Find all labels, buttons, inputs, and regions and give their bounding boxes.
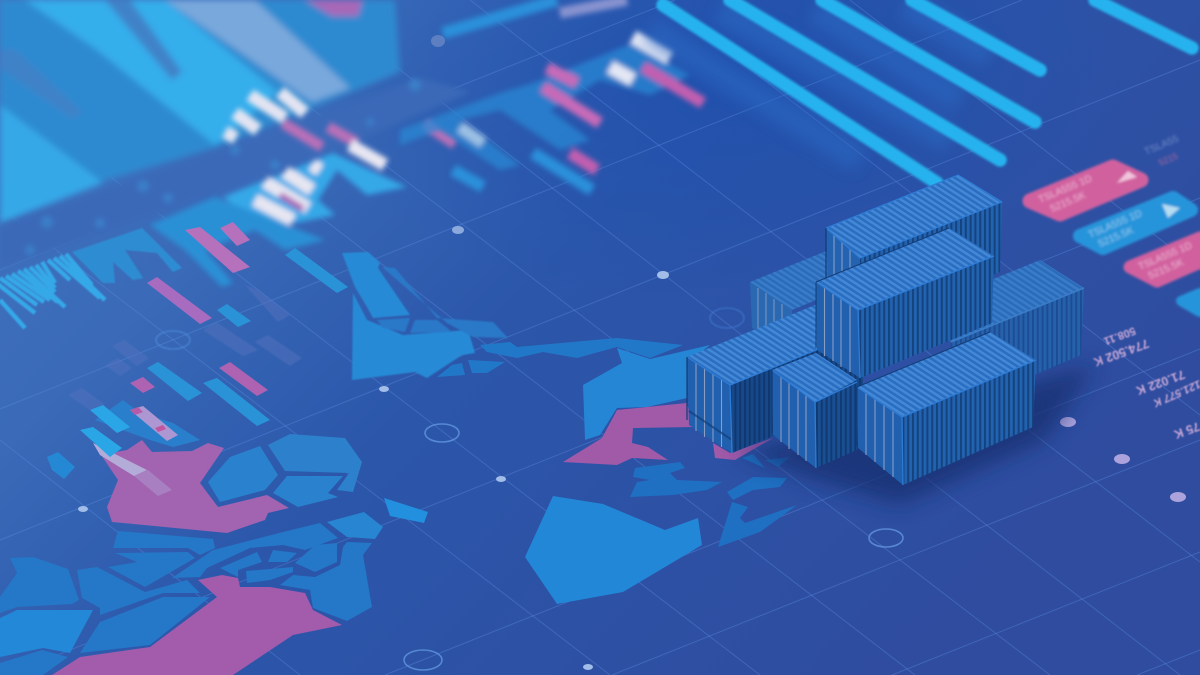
- pink candle: [147, 277, 212, 324]
- pink highlighted region: center: [563, 403, 773, 465]
- container: right back: [907, 260, 1084, 410]
- pink small candles: [130, 377, 155, 393]
- dashboard pills: 5215: [1157, 151, 1179, 168]
- pill: blue one: 5215.5K: [1097, 225, 1136, 250]
- teal candles: [217, 304, 251, 327]
- lower center landmass: [525, 496, 702, 604]
- center east landmass: [583, 345, 710, 440]
- center band: [437, 338, 683, 377]
- pill: pink two: [1130, 238, 1200, 282]
- center north landmass: [342, 252, 508, 380]
- container shadow: [735, 365, 1095, 505]
- pink candle upper: [185, 227, 250, 273]
- data dots right: [1060, 417, 1186, 502]
- dark diagonal band: [0, 78, 470, 268]
- container: left back: [750, 228, 925, 345]
- pill: pink one: [1030, 167, 1141, 215]
- pill: pink one: 5215.5K: [1049, 190, 1088, 215]
- container: front left: [687, 303, 863, 453]
- candlesticks mid: [68, 222, 348, 426]
- pill: blue two: [1181, 293, 1200, 312]
- container: top back: [826, 175, 1002, 330]
- translucent candles over pink region: [80, 405, 178, 496]
- faint header text: TSLA55: [1143, 133, 1181, 158]
- grid target rings: [156, 308, 903, 670]
- white candles above band: [225, 92, 305, 138]
- cyan trend bars top right: [650, 0, 1192, 183]
- upside-down data readouts: [1092, 324, 1200, 441]
- container: front right: [857, 332, 1036, 485]
- container stack: [687, 175, 1084, 485]
- cyan fan below band: [223, 153, 407, 228]
- pink candles above band: [283, 123, 455, 147]
- world map regions: lower left: [0, 400, 428, 675]
- candlestick chart: left: [150, 92, 455, 287]
- pill: blue one: [1080, 198, 1191, 250]
- world map regions: center: [342, 252, 797, 604]
- dashboard pills: [1030, 133, 1200, 312]
- grid nodes: [78, 35, 669, 670]
- container: front middle: [772, 353, 857, 468]
- mountain bars lower left: [0, 228, 182, 328]
- candlestick chart: top middle: [400, 0, 703, 190]
- upside-down data readouts: 508.11: [1102, 324, 1137, 347]
- pill: pink two: 5215.5K: [1147, 257, 1186, 282]
- pill: pink two: TSLA555 1D: [1137, 240, 1194, 273]
- pill: blue one: TSLA555 1D: [1087, 208, 1144, 241]
- faint ghost candles: [68, 285, 302, 410]
- white candles below band: [255, 145, 385, 220]
- center islands: [630, 454, 797, 547]
- band dots: [25, 79, 421, 255]
- upside-down data readouts: 71.022 K: [1134, 367, 1187, 398]
- top left market depth chart: [0, 0, 400, 223]
- container: center top: [816, 228, 994, 378]
- bar halos: [650, 5, 990, 160]
- pill: pink one: TSLA555 1D: [1037, 173, 1094, 206]
- pink highlighted regions: lower left: [52, 440, 342, 675]
- bars: [663, 0, 1192, 183]
- upside-down data readouts: 774.502 K: [1092, 336, 1151, 369]
- pink candle below band: [280, 195, 303, 209]
